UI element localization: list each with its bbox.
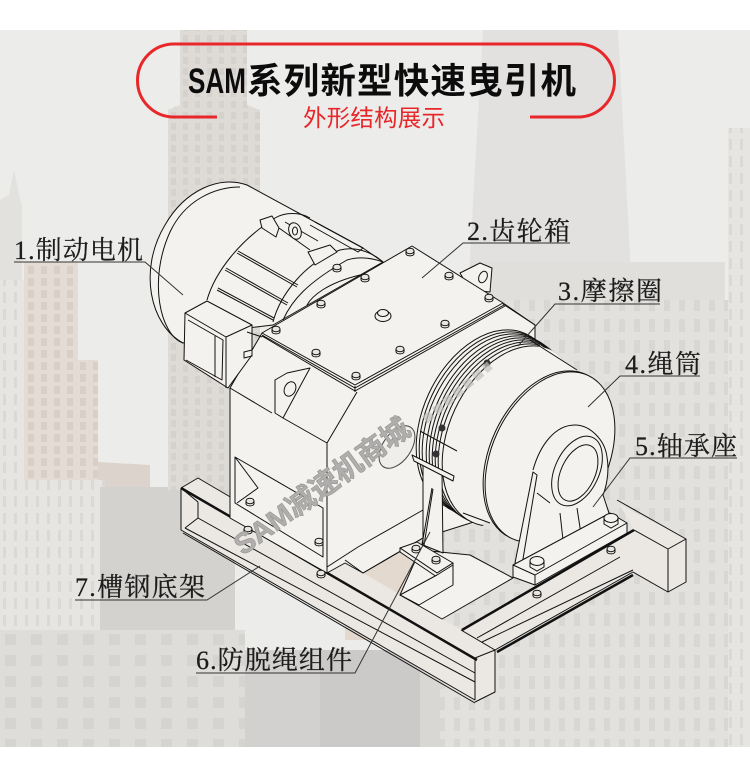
label 6: rope guard assembly [196,532,430,675]
ring bolts [432,360,490,458]
brake motor [150,182,383,388]
label 7: channel base [75,566,260,602]
label 1: brake motor: 1.制动电机 [14,236,143,265]
junction box [184,301,262,388]
subtitle: 外形结构展示 [303,105,445,131]
motor fins [217,222,363,320]
channel steel base frame [181,478,686,703]
bearing seat [513,425,627,598]
title block [138,44,614,131]
label 5: bearing seat: 5.轴承座 [635,432,737,461]
main title: 系列新型快速曳引机 [247,61,576,101]
foot bolts [530,514,618,598]
lifting eye [260,216,337,265]
housing lower cutout [235,457,323,557]
label 7: channel base: 7.槽钢底架 [75,573,205,602]
label 3: friction ring: 3.摩擦圈 [558,277,662,306]
anti-detachment rope guard [400,455,454,605]
centre plug [375,310,391,322]
watermark [228,365,490,562]
lug hole [477,270,489,284]
main title: SAM [188,61,246,101]
label 6: rope guard assembly: 6.防脱绳组件 [196,646,352,675]
mounting bolts [244,498,325,578]
label 5: bearing seat [593,432,737,507]
friction ring [416,329,562,526]
label 4: rope drum: 4.绳筒 [625,350,701,379]
label 1: brake motor [14,236,183,295]
title frame [138,44,614,117]
housing lug left [282,380,298,398]
watermark: SAM减速机商城 [228,412,417,562]
rope drum [457,340,641,563]
gear box top plate [262,246,505,392]
label 4: rope drum [588,350,701,407]
housing lug right [460,263,492,292]
gear box housing [230,263,535,578]
foot plate [513,513,627,585]
label 3: friction ring [518,277,662,346]
label 2: gear box: 2.齿轮箱 [467,217,570,246]
label 2: gear box [422,217,570,278]
machine illustration [150,182,686,703]
